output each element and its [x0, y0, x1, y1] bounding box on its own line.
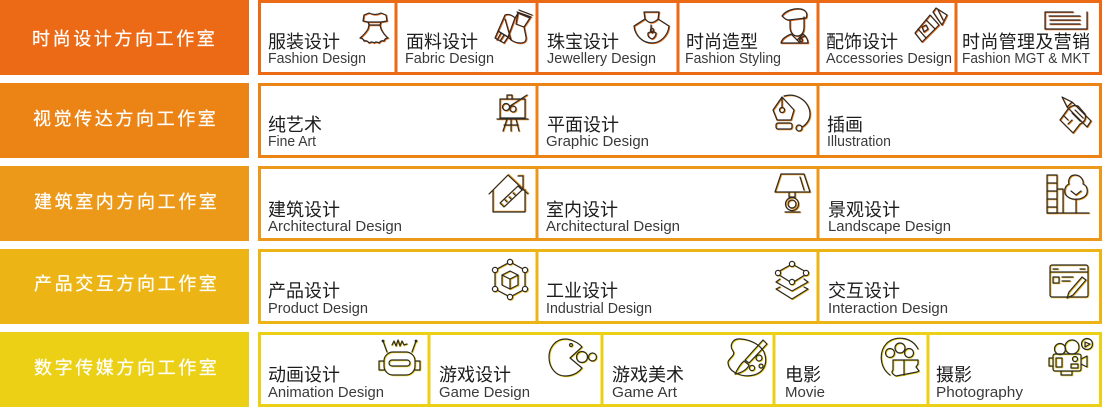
course: graphic design: 平面设计 — [547, 115, 619, 135]
course: game art — [612, 365, 684, 401]
icon: lamp — [775, 174, 811, 213]
panel: architecture courses frame — [260, 168, 1100, 240]
course: fine art: 纯艺术 — [268, 115, 322, 135]
course: fashion design — [268, 32, 366, 67]
course: fine art: Fine Art — [268, 133, 317, 150]
course: architectural design: 建筑设计 — [268, 200, 340, 220]
heading: digital media studio: 数字传媒方向工作室 — [34, 358, 219, 378]
course: fabric design: 面料设计 — [406, 32, 478, 52]
course: fashion management and marketing: 时尚管理及营销 — [962, 32, 1090, 52]
course: photography: 摄影 — [936, 365, 972, 385]
course: interior design: 室内设计 — [546, 200, 618, 220]
icon: pen tool — [773, 95, 811, 132]
heading: architecture studio — [0, 166, 249, 241]
course: fashion styling — [685, 32, 781, 67]
course: graphic design — [546, 115, 649, 150]
row: digital media studio — [0, 332, 1100, 407]
course: jewellery design — [547, 32, 656, 67]
course: accessories design — [826, 32, 952, 67]
course: interaction design: Interaction Design — [828, 300, 948, 317]
course: photography: Photography — [936, 384, 1023, 401]
heading: fashion studio: 时尚设计方向工作室 — [32, 29, 217, 49]
course: movie: Movie — [785, 384, 825, 401]
icon: dress — [360, 13, 389, 44]
course: game design: 游戏设计 — [439, 365, 511, 385]
panel: visual courses frame — [260, 84, 1100, 157]
heading: digital media studio — [0, 332, 249, 407]
icon: stylist — [781, 9, 809, 44]
icon: film and popcorn — [881, 338, 920, 377]
icon: necklace — [634, 12, 670, 44]
course: interaction design: 交互设计 — [828, 281, 900, 301]
course: illustration: Illustration — [827, 133, 891, 150]
course: fashion styling: Fashion Styling — [685, 50, 781, 67]
heading: visual communication studio — [0, 83, 249, 158]
course: landscape design — [828, 200, 951, 235]
course: animation design: 动画设计 — [268, 365, 340, 385]
icon: video camera — [1049, 338, 1093, 376]
course: industrial design: 工业设计 — [546, 281, 618, 301]
course: architectural design: Architectural Design — [268, 218, 402, 235]
course: jewellery design: Jewellery Design — [547, 50, 656, 67]
course: game design: Game Design — [439, 384, 530, 401]
course: movie: 电影 — [785, 365, 821, 385]
course: product design: 产品设计 — [268, 281, 340, 301]
course: fashion design: 服装设计 — [268, 32, 340, 52]
icon: easel — [497, 95, 529, 132]
icon: interface with pencil — [1050, 265, 1089, 299]
course: product design: Product Design — [268, 300, 368, 317]
icon: belt — [915, 8, 948, 43]
icon: scarf — [495, 10, 533, 44]
course: fashion styling: 时尚造型 — [686, 32, 758, 52]
course: landscape design: 景观设计 — [828, 200, 900, 220]
heading: product interaction studio — [0, 249, 249, 324]
course: interaction design — [828, 281, 948, 317]
course: animation design — [268, 365, 384, 401]
course: accessories design: Accessories Design — [826, 50, 952, 67]
course: industrial design: Industrial Design — [546, 300, 652, 317]
icon: building and tree — [1047, 175, 1090, 214]
course: industrial design — [546, 281, 652, 317]
icon: hexagon cube — [492, 259, 528, 300]
heading: visual communication studio: 视觉传达方向工作室 — [33, 109, 218, 129]
row: product interaction studio — [0, 249, 1100, 324]
icon: palette and brush — [728, 339, 768, 376]
course: game art: 游戏美术 — [612, 365, 684, 385]
course: jewellery design: 珠宝设计 — [547, 32, 619, 52]
heading: fashion studio — [0, 0, 249, 75]
course: fashion management and marketing: Fashion MGT & MKT — [962, 50, 1090, 67]
course: architectural design — [268, 200, 402, 235]
course: game art: Game Art — [612, 384, 678, 401]
course: animation design: Animation Design — [268, 384, 384, 401]
icon: robot — [379, 340, 421, 376]
row: fashion design studio — [0, 0, 1100, 75]
panel: fashion courses frame — [260, 2, 1100, 74]
course: fabric design: Fabric Design — [405, 50, 494, 67]
course: fabric design — [405, 32, 494, 67]
icon: pac-man — [549, 339, 597, 377]
icon: house with ruler — [489, 174, 529, 212]
course: product design — [268, 281, 368, 317]
course: interior design: Architectural Design — [546, 218, 680, 235]
course: fashion design: Fashion Design — [268, 50, 366, 67]
course: illustration — [827, 115, 891, 150]
row: visual communication studio — [0, 83, 1100, 158]
course: graphic design: Graphic Design — [546, 133, 649, 150]
heading: architecture studio: 建筑室内方向工作室 — [34, 192, 219, 212]
course: accessories design: 配饰设计 — [826, 32, 898, 52]
row: architecture and interior studio — [0, 166, 1100, 241]
course: photography — [936, 365, 1023, 401]
course: movie — [785, 365, 825, 401]
course: game design — [439, 365, 530, 401]
icon: hand with pencil — [1060, 97, 1092, 134]
course: landscape design: Landscape Design — [828, 218, 951, 235]
panel: digital media courses frame — [260, 334, 1100, 406]
course: fashion management and marketing — [962, 32, 1090, 67]
panel: product courses frame — [260, 250, 1100, 323]
course: fine art — [268, 115, 322, 150]
course: illustration: 插画 — [827, 115, 863, 135]
icon: layers — [775, 261, 809, 300]
heading: product interaction studio: 产品交互方向工作室 — [34, 274, 219, 294]
icon: document — [1045, 12, 1088, 30]
course: interior design — [546, 200, 680, 235]
